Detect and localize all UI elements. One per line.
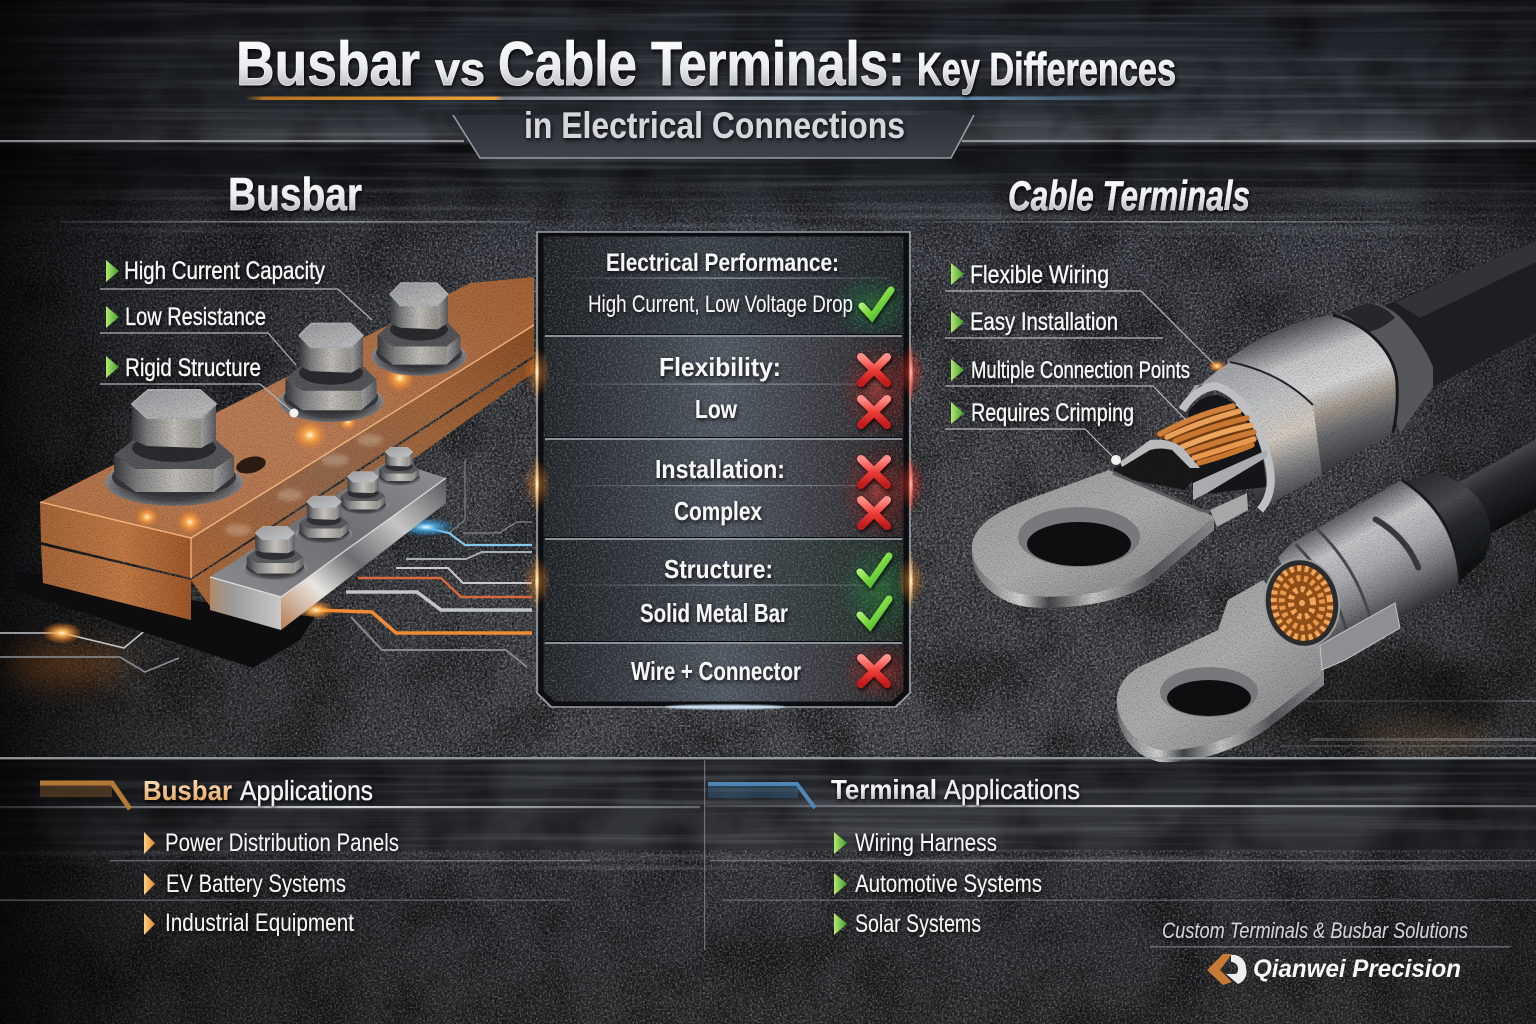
crimp rail <box>1320 603 1400 670</box>
row: Structure: Structure: <box>664 554 773 584</box>
collar <box>1340 303 1433 433</box>
title header <box>0 30 1536 158</box>
front sleeve <box>1179 362 1322 508</box>
list: Wiring Harness <box>855 829 997 857</box>
main title: Cable Terminals: <box>498 30 905 99</box>
item: Requires Crimping: Requires Crimping <box>971 399 1134 427</box>
rail under strands <box>1113 450 1267 527</box>
item: Flexible Wiring: Flexible Wiring <box>970 261 1109 289</box>
item: Easy Installation: Easy Installation <box>970 308 1118 336</box>
footer branding <box>1150 918 1510 985</box>
exposed copper strands <box>1153 403 1256 465</box>
item: High Current Capacity: High Current Capacity <box>124 257 325 285</box>
main title <box>236 30 1176 99</box>
brand name: Qianwei Precision <box>1253 955 1461 983</box>
circuit traces behind busbar <box>0 460 532 672</box>
busbar feature list <box>100 257 372 418</box>
steel bar with small bolts <box>210 447 446 630</box>
heading text: Busbar <box>143 775 232 806</box>
panel: busbar applications <box>0 775 700 937</box>
copper strand core <box>1258 553 1346 653</box>
main title: vs <box>435 43 485 95</box>
list: Automotive Systems <box>855 870 1042 898</box>
cable <box>1385 241 1536 387</box>
row: Wire + Connector: Wire + Connector <box>631 656 801 686</box>
item: Requires Crimping <box>945 399 1134 465</box>
heading text <box>143 775 373 806</box>
logo icon <box>1207 954 1247 985</box>
heading text <box>831 774 1080 805</box>
row: Flexibility: Low <box>695 394 738 424</box>
heading tab <box>706 784 1536 808</box>
heading: Cable Terminals: Cable Terminals <box>1008 172 1250 219</box>
main sleeve <box>1227 315 1397 510</box>
row: Structure <box>640 554 889 628</box>
item: Multiple Connection Points: Multiple Connection Points <box>971 357 1190 384</box>
item: Low Resistance <box>100 303 296 365</box>
row: Installation: Complex <box>674 496 762 526</box>
row: Structure: Solid Metal Bar <box>640 598 788 628</box>
bottom section divider lines <box>0 757 1536 759</box>
list: Industrial Equipment <box>165 909 354 937</box>
main title: Key Differences <box>917 43 1176 95</box>
black insulation <box>1113 440 1200 490</box>
black insulating base <box>14 572 315 668</box>
panel: terminal applications <box>706 774 1536 938</box>
row: Electrical Performance <box>588 249 891 318</box>
list <box>0 829 590 937</box>
cable terminal feature list <box>945 261 1226 465</box>
list: EV Battery Systems <box>166 870 346 898</box>
heading: Busbar: Busbar <box>228 168 362 220</box>
lower copper bar <box>41 358 534 620</box>
list: Solar Systems <box>855 910 981 938</box>
list: Power Distribution Panels <box>165 829 399 857</box>
item: Low Resistance: Low Resistance <box>125 303 266 331</box>
cable terminal illustration: upper <box>972 241 1536 608</box>
opening interior <box>1188 395 1267 495</box>
row: Flexibility <box>659 352 887 425</box>
row: Flexibility: Flexibility: <box>659 352 781 382</box>
ring lug <box>972 470 1214 608</box>
cable terminal illustration: lower <box>1117 419 1536 762</box>
subtitle plate: in Electrical Connections <box>524 105 905 146</box>
cable <box>1442 419 1536 544</box>
item: High Current Capacity <box>100 257 372 320</box>
subtitle plate <box>0 105 1536 158</box>
heading text: Terminal <box>831 774 937 805</box>
item: Rigid Structure: Rigid Structure <box>125 354 261 382</box>
comparison table panel <box>523 232 925 710</box>
row: Electrical Performance: Electrical Performance: <box>606 249 839 277</box>
ring rim <box>1182 386 1271 510</box>
upper copper bar <box>40 277 534 578</box>
busbar illustration <box>14 277 534 668</box>
heading tab <box>0 783 700 809</box>
item: Rigid Structure <box>100 354 298 418</box>
heading text: Applications <box>944 774 1080 805</box>
list <box>710 829 1536 938</box>
main title: Busbar <box>236 30 420 99</box>
header divider rule <box>245 96 1170 100</box>
row: Installation: Installation: <box>655 454 785 484</box>
ring lug <box>1117 580 1324 762</box>
barrel and collar <box>1274 451 1511 655</box>
bolts on copper bar <box>105 283 467 506</box>
tagline: Custom Terminals & Busbar Solutions <box>1162 918 1468 943</box>
heading text: Applications <box>240 775 373 806</box>
item: Multiple Connection Points <box>945 357 1190 420</box>
item: Flexible Wiring <box>945 261 1226 372</box>
row: Electrical Performance: High Current, Low Voltage Drop <box>588 291 853 318</box>
row: Installation <box>655 454 887 526</box>
